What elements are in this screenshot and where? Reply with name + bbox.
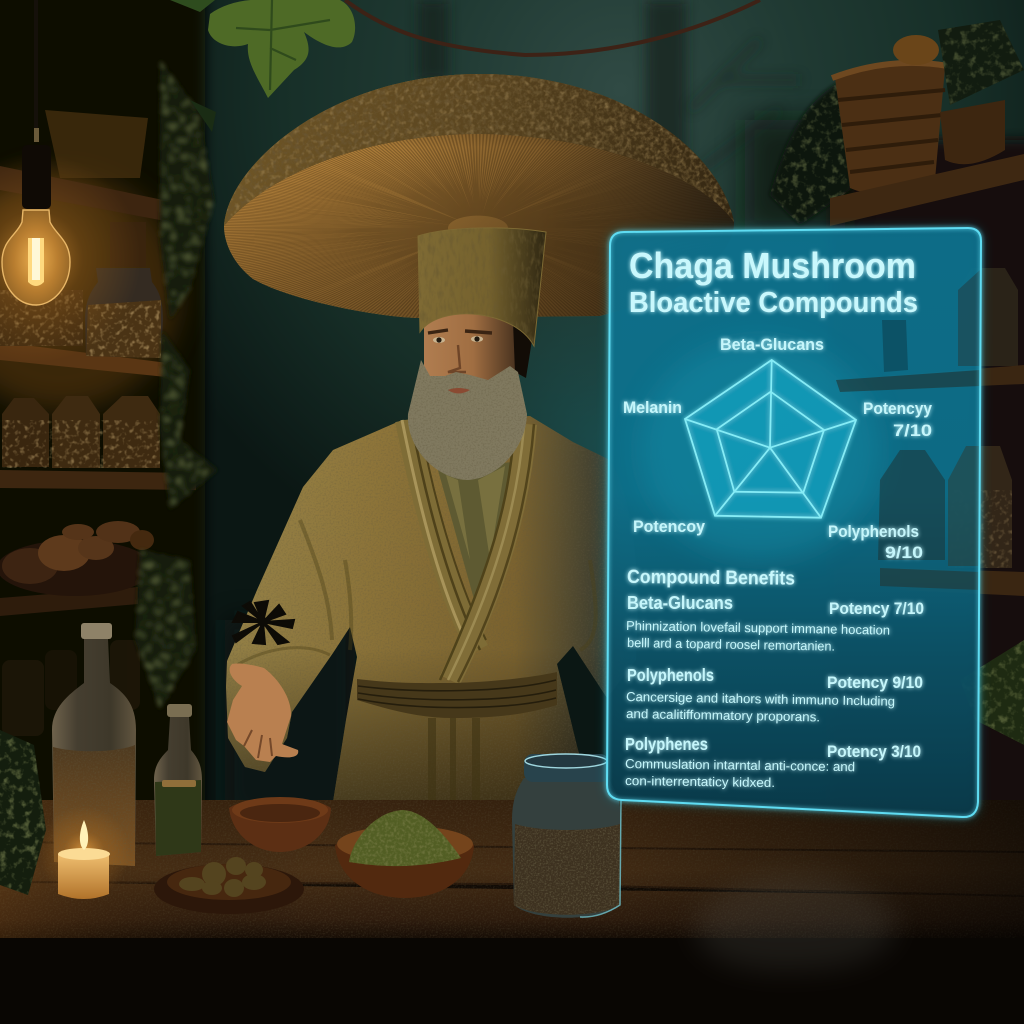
benefit: beta-glucans: Phinnization lovefail support immane hocation <box>626 618 890 638</box>
benefit: polyphenes: Potency 3/10 <box>827 742 921 761</box>
smoke <box>696 875 896 971</box>
inner shirt <box>438 462 513 610</box>
man robe <box>226 416 638 802</box>
panel title: Bloactive Compounds <box>629 287 918 319</box>
small glass bottle <box>154 704 202 856</box>
bowl of green powder <box>335 810 474 898</box>
radar labels: 9/10 <box>885 543 923 562</box>
panel outline <box>607 228 981 817</box>
hanging vine and leaf <box>170 0 760 132</box>
mushroom stem hat <box>418 228 546 346</box>
sash <box>357 672 557 718</box>
man head <box>408 300 532 480</box>
candle <box>38 806 130 899</box>
benefit: polyphenes: Commuslation intarntal anti-conce: and <box>625 756 855 774</box>
hanging plants <box>135 60 218 710</box>
benefit: polyphenes: Polyphenes <box>625 734 708 754</box>
lower robe stripes <box>428 718 480 802</box>
man beard <box>408 360 527 480</box>
glass jar of powder <box>512 754 621 918</box>
benefit: polyphenols: Cancersige and itahors with immuno Including <box>626 689 895 709</box>
benefit: beta-glucans: Beta-Glucans <box>627 592 733 613</box>
benefit: beta-glucans: belll ard a topard roosel remortanien. <box>627 635 835 654</box>
left hand <box>227 663 298 762</box>
large glass bottle <box>52 623 136 866</box>
hanging lamp <box>0 0 141 363</box>
jars on middle shelf <box>2 396 160 468</box>
benefit: polyphenols <box>626 665 923 724</box>
dark jars low shelf <box>2 640 140 736</box>
right shelves and basket <box>770 20 1024 745</box>
benefit: beta-glucans <box>626 592 924 654</box>
panel glass <box>607 228 981 817</box>
shelf and jars seen through the panel <box>836 270 980 590</box>
jars on upper shelf <box>0 268 163 358</box>
benefit: polyphenes: con-interrentaticy kidxed. <box>625 773 775 790</box>
sleeve emblem <box>233 601 294 644</box>
panel title: Chaga Mushroom <box>629 245 916 286</box>
left shelves <box>0 60 218 736</box>
robe folds <box>232 520 596 668</box>
holographic panel <box>607 228 981 817</box>
compound benefits heading: Compound Benefits <box>627 566 795 590</box>
benefit: polyphenols: Polyphenols <box>627 665 714 685</box>
wall glow near lamp <box>0 170 180 410</box>
wooden table <box>0 800 1024 1024</box>
robe collar <box>402 420 534 682</box>
radar labels <box>623 335 932 562</box>
radar labels: Beta-Glucans <box>720 335 824 354</box>
benefit: polyphenes <box>625 734 921 790</box>
cap gill lines <box>223 74 734 333</box>
radar chart <box>685 360 856 518</box>
empty clay bowl <box>229 797 331 852</box>
radar labels: Polyphenols <box>828 522 919 541</box>
panel title <box>629 245 918 319</box>
radar labels: Melanin <box>623 398 682 417</box>
left foliage <box>0 730 46 895</box>
plate of chaga chunks <box>154 857 304 914</box>
benefit: polyphenols: and acalitiffommatory proporans. <box>626 706 820 724</box>
benefit: polyphenols: Potency 9/10 <box>827 673 923 692</box>
dried mushrooms on lower shelf <box>0 521 154 596</box>
mushroom cap <box>223 74 734 333</box>
benefit: beta-glucans: Potency 7/10 <box>829 599 924 618</box>
radar labels: Potencoy <box>633 517 705 536</box>
radar labels: Potencyy <box>863 399 932 418</box>
radar labels: 7/10 <box>893 421 932 440</box>
